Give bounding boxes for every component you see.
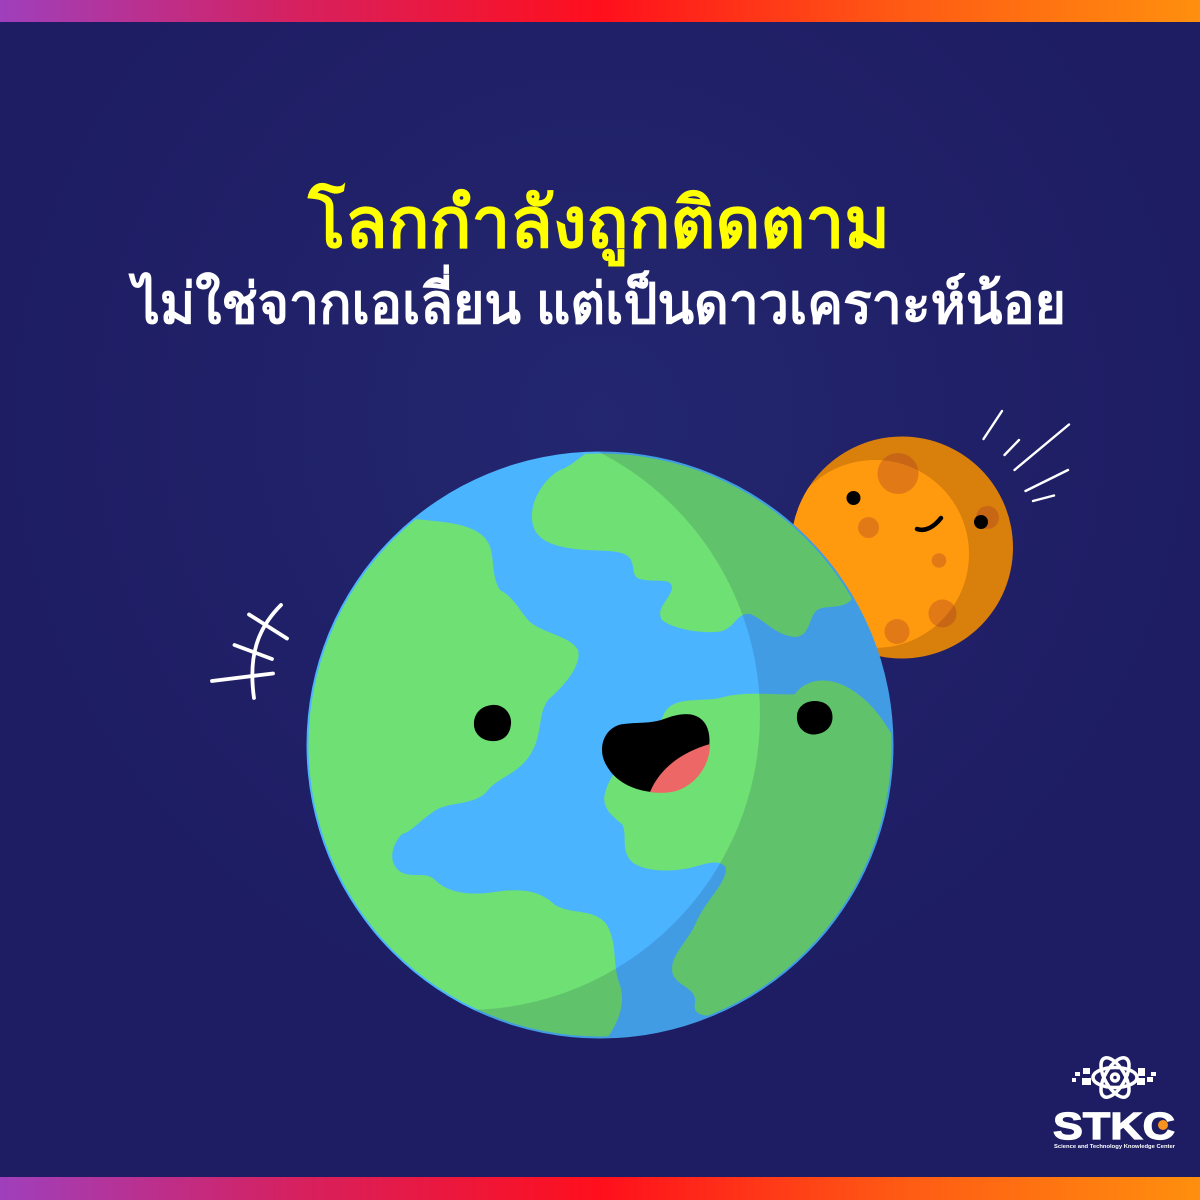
logo orange dot [1158, 1120, 1168, 1130]
continents [308, 454, 892, 1036]
top gradient bar [0, 0, 1200, 22]
logo atom icon [1093, 1053, 1137, 1102]
logo wordmark: STKC [1053, 1106, 1175, 1148]
mouth interior [602, 714, 709, 792]
earth left eye [474, 705, 511, 741]
logo tagline: Science and Technology Knowledge Center [1054, 1144, 1176, 1150]
asteroid smile [917, 518, 941, 530]
bottom gradient bar [0, 1177, 1200, 1200]
tongue [650, 744, 710, 793]
motion lines left of earth [212, 605, 287, 698]
STKC logo [1053, 1053, 1176, 1150]
title line 1: โลกกำลังถูกติดตาม [307, 182, 890, 267]
right continent [604, 680, 900, 1016]
top continent [532, 454, 852, 637]
earth character [306, 452, 894, 1038]
asteroid lit side [781, 460, 969, 648]
logo data squares [1072, 1068, 1156, 1085]
asteroid eyes [846, 491, 988, 529]
title [128, 182, 1066, 335]
earth shadow [474, 452, 894, 1038]
moon / asteroid character [781, 436, 1013, 658]
earth right eye [797, 701, 833, 735]
left continent [308, 519, 622, 1036]
title line 2: ไม่ใช่จากเอเลี่ยน แต่เป็นดาวเคราะห์น้อย [128, 264, 1066, 335]
asteroid craters [858, 453, 999, 644]
motion lines near asteroid [984, 411, 1069, 501]
ocean [306, 452, 894, 1038]
asteroid body [791, 436, 1013, 658]
earth mouth [602, 714, 710, 793]
